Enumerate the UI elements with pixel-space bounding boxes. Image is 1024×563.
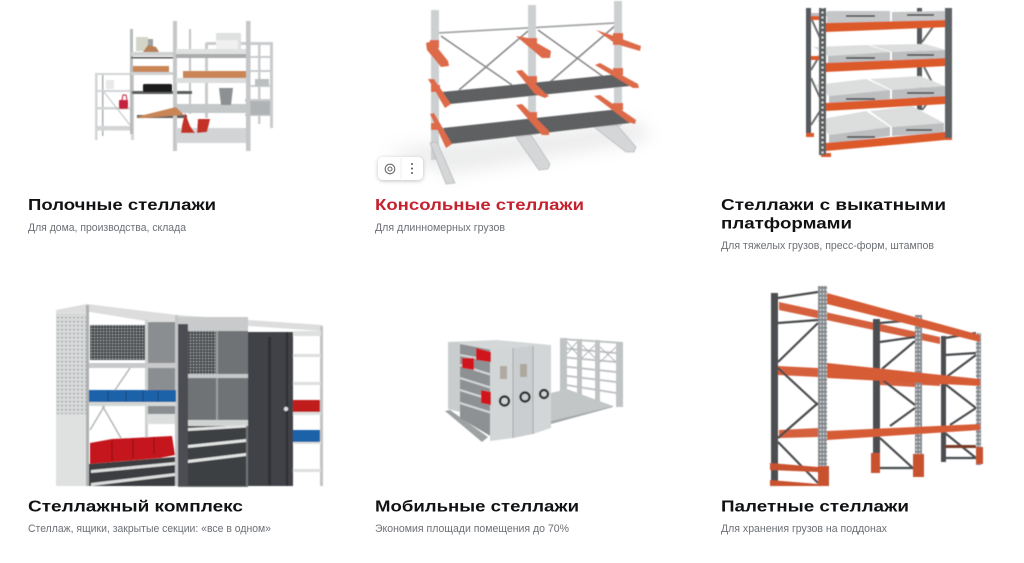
back right rack bbox=[205, 42, 273, 128]
image: pallet racks bbox=[770, 286, 983, 486]
back beams bbox=[778, 302, 940, 438]
subtitle: pallet racks: Для хранения грузов на поддонах bbox=[721, 523, 887, 535]
front beams bbox=[827, 293, 980, 440]
base guards bbox=[770, 445, 983, 486]
title: storage complex: Стеллажный комплекс bbox=[28, 498, 243, 516]
perforated grey uprights bbox=[818, 286, 981, 483]
stored goods bbox=[106, 33, 246, 133]
uprights and bracing bbox=[431, 1, 622, 160]
subtitle: shelving racks: Для дома, производства, склада bbox=[28, 222, 187, 234]
red boxes bbox=[462, 348, 491, 405]
subtitle: mobile racks: Экономия площади помещения до 70% bbox=[375, 523, 569, 535]
subtitle: cantilever racks: Для длинномерных грузов bbox=[375, 222, 505, 234]
front uprights bbox=[819, 8, 952, 155]
title: pallet racks: Палетные стеллажи bbox=[721, 498, 909, 516]
main front rack bbox=[173, 21, 250, 151]
middle cabinet bbox=[178, 317, 248, 487]
back uprights bbox=[806, 8, 936, 136]
dark uprights bbox=[771, 293, 946, 483]
title: mobile racks: Мобильные стеллажи bbox=[375, 498, 579, 516]
left bay bbox=[89, 315, 178, 486]
platform handles bbox=[846, 15, 934, 137]
icon: more menu bbox=[411, 163, 413, 174]
middle rack bbox=[130, 29, 192, 134]
title: roll-out platform racks: платформами bbox=[721, 216, 852, 232]
top frame bbox=[56, 304, 322, 331]
base feet bbox=[430, 125, 636, 184]
title: roll-out platform racks: Стеллажи с выкатными bbox=[721, 197, 946, 214]
back rack bbox=[560, 338, 623, 407]
rail platform bbox=[445, 389, 613, 442]
image: mobile racks bbox=[445, 338, 623, 442]
windows and wheels bbox=[500, 364, 548, 406]
orange beams bbox=[806, 16, 952, 157]
image: cantilever racks bbox=[385, 1, 650, 184]
image: roll-out platform racks bbox=[806, 8, 952, 157]
title: shelving racks: Полочные стеллажи bbox=[28, 197, 216, 214]
bracing bbox=[778, 292, 976, 483]
open door bbox=[248, 332, 293, 486]
orange arms bbox=[426, 30, 641, 148]
subtitle: roll-out platform racks: Для тяжелых грузов, пресс-форм, штампов bbox=[721, 240, 934, 252]
small left rack bbox=[95, 73, 134, 140]
title: cantilever racks: Консольные стеллажи bbox=[375, 197, 584, 214]
dark shelf decks bbox=[442, 74, 630, 144]
right bay bbox=[293, 326, 323, 486]
camera overlay widget bbox=[378, 157, 423, 180]
icon: camera bbox=[385, 164, 395, 174]
mobile units bbox=[448, 340, 551, 441]
image: shelving racks bbox=[95, 21, 273, 151]
platforms bbox=[811, 11, 946, 144]
subtitle: storage complex: Стеллаж, ящики, закрытые секции: «все в одном» bbox=[28, 523, 271, 535]
left side panel bbox=[56, 305, 89, 486]
title: roll-out platform racks bbox=[721, 197, 946, 232]
floor shadow bbox=[385, 120, 650, 175]
image: storage complex bbox=[56, 304, 323, 487]
